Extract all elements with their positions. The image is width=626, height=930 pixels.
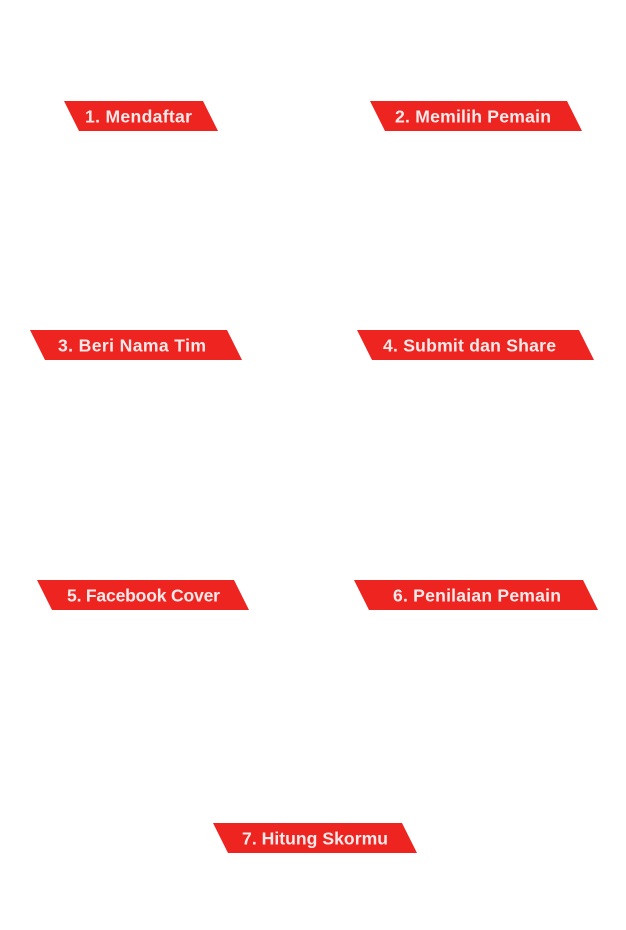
heading: 3. Beri Nama Tim	[30, 330, 242, 360]
heading: 2. Memilih Pemain	[370, 101, 582, 131]
heading: 1. Mendaftar: 1. Mendaftar	[85, 106, 192, 126]
heading: 3. Beri Nama Tim: 3. Beri Nama Tim	[58, 336, 206, 356]
heading: 5. Facebook Cover: 5. Facebook Cover	[67, 586, 220, 606]
heading: 2. Memilih Pemain: 2. Memilih Pemain	[395, 106, 551, 126]
heading: 5. Facebook Cover	[37, 580, 249, 610]
heading: 6. Penilaian Pemain	[354, 580, 598, 610]
heading: 7. Hitung Skormu	[213, 823, 417, 853]
heading: 1. Mendaftar	[64, 101, 218, 131]
heading: 4. Submit dan Share	[357, 330, 594, 360]
heading: 4. Submit dan Share: 4. Submit dan Share	[383, 336, 556, 356]
heading: 6. Penilaian Pemain: 6. Penilaian Pemain	[393, 586, 561, 606]
heading: 7. Hitung Skormu: 7. Hitung Skormu	[242, 828, 388, 848]
